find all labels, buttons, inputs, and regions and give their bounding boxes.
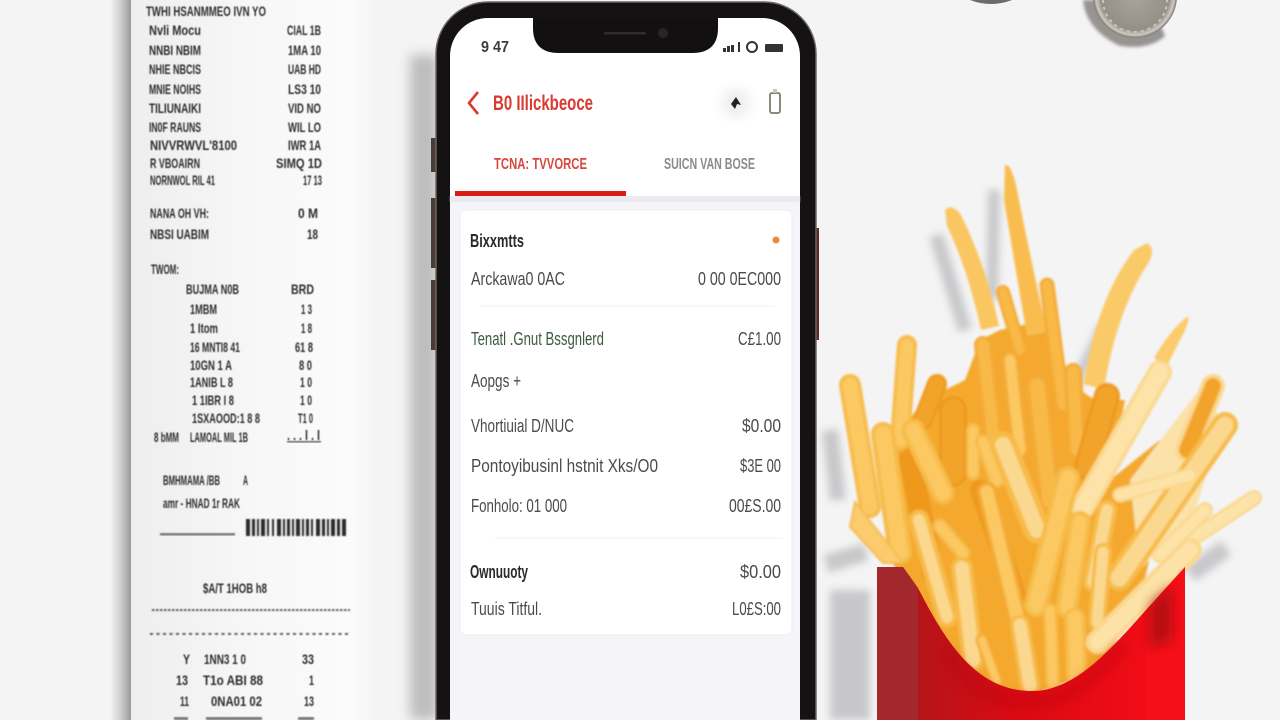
device icon bbox=[770, 89, 780, 113]
right coin bbox=[1083, 0, 1177, 47]
inactive tab label: SUICN VAN BOSE bbox=[664, 156, 755, 173]
receipt items block bbox=[149, 22, 322, 242]
receipt items block: NANA OH VH: bbox=[150, 205, 209, 221]
receipt bottom rows: 11 bbox=[180, 693, 189, 709]
row: highlighted total bbox=[471, 329, 781, 349]
receipt items block: 18 bbox=[307, 226, 318, 242]
phone shadow bbox=[410, 55, 438, 720]
phone bbox=[431, 2, 819, 720]
receipt sub-items block: 1SXAOOD:1 8 8 bbox=[192, 410, 260, 426]
fries shadows bbox=[826, 190, 1226, 720]
receipt bottom rows: 1NN3 1 0 bbox=[204, 651, 246, 667]
receipt items block: VID NO bbox=[288, 100, 321, 116]
section heading: Bixxmtts bbox=[470, 231, 524, 251]
receipt items block: Nvli Mocu bbox=[149, 22, 201, 38]
row: highlighted total: C£1.00 bbox=[738, 329, 781, 349]
row: item one: Vhortiuial D/NUC bbox=[471, 416, 574, 436]
receipt footer code: $A/T 1HOB h8 bbox=[203, 580, 267, 596]
receipt sub-items block: 1 Itom bbox=[190, 320, 218, 336]
receipt sub-items block: 1ANIB L 8 bbox=[190, 374, 233, 390]
receipt sub-items block: BRD bbox=[291, 281, 314, 297]
pale fries mass bbox=[1130, 395, 1225, 570]
row: account: Arckawa0 0AC bbox=[471, 269, 565, 289]
receipt items block: NIVVRWVL'8100 bbox=[150, 137, 237, 153]
front fries bbox=[850, 478, 1190, 686]
receipt items block: CIAL 1B bbox=[287, 22, 321, 38]
receipt sub-items block: 10GN 1 A bbox=[190, 357, 232, 373]
receipt sub-items block: 1 1IBR I 8 bbox=[192, 392, 234, 408]
receipt sub-items block: 1 3 bbox=[301, 301, 312, 317]
row: total: Tuuis Titful. bbox=[471, 599, 542, 619]
receipt items block: MNIE NOIHS bbox=[149, 81, 201, 97]
receipt items block: R VBOAIRN bbox=[150, 155, 200, 171]
left coin bbox=[970, 0, 1012, 4]
row: item two: $3E 00 bbox=[740, 456, 781, 476]
side buttons bbox=[431, 138, 819, 350]
active tab underline bbox=[455, 191, 626, 196]
receipt payment block: amr - HNAD 1r RAK bbox=[163, 495, 240, 511]
row: total bbox=[471, 599, 781, 619]
receipt sub-items block: 61 8 bbox=[295, 339, 313, 355]
receipt bottom rows: Y bbox=[183, 651, 190, 667]
receipt dotted rule bbox=[189, 562, 281, 564]
receipt barcode bbox=[246, 519, 346, 536]
row: apps heading: Aopgs + bbox=[471, 371, 521, 391]
middle fries bbox=[850, 345, 1254, 582]
row: item three bbox=[471, 496, 781, 516]
share icon bbox=[722, 89, 750, 117]
status icons bbox=[723, 42, 783, 52]
coins bbox=[970, 0, 1177, 47]
receipt payment block bbox=[160, 472, 248, 536]
receipt bbox=[110, 0, 372, 720]
receipt items block: 1MA 10 bbox=[288, 42, 321, 58]
receipt paper bbox=[131, 0, 372, 720]
receipt items block: LS3 10 bbox=[288, 81, 321, 97]
box body bbox=[877, 567, 1185, 720]
row: account: 0 00 0EC000 bbox=[698, 269, 781, 289]
content background bbox=[450, 196, 800, 720]
box right inner shadow bbox=[1150, 585, 1172, 648]
row: total: L0£S:00 bbox=[732, 599, 781, 619]
receipt sub-items block: 1 8 bbox=[301, 320, 312, 336]
receipt payment block: BMHMAMA /BB bbox=[163, 472, 220, 488]
row: quantity: $0.00 bbox=[740, 562, 781, 582]
receipt bottom rows: 1 bbox=[309, 672, 314, 688]
box opening shadow bbox=[945, 645, 1125, 702]
receipt sub-items block: 1MBM bbox=[190, 301, 217, 317]
divider bbox=[495, 537, 783, 539]
receipt bottom rows: 13 bbox=[304, 693, 314, 709]
receipt sub-items block: 1 0 bbox=[300, 392, 312, 408]
receipt items block: NORNWOL RIL 41 bbox=[150, 172, 215, 188]
row: item two: Pontoyibusinl hstnit Xks/O0 bbox=[471, 456, 658, 476]
fries box bbox=[877, 567, 1185, 720]
receipt header: TWHI HSANMMEO IVN YO bbox=[146, 3, 266, 19]
fries base mass bbox=[885, 320, 1170, 695]
card background bbox=[460, 210, 792, 635]
receipt bottom rows: 0NA01 02 bbox=[211, 693, 262, 709]
box left fold bbox=[877, 567, 918, 720]
receipt sub-items block bbox=[151, 261, 321, 445]
receipt items block: SIMQ 1D bbox=[276, 155, 322, 171]
receipt sub-items block: LAMOAL MIL 1B bbox=[190, 429, 248, 445]
receipt sub-items block: 8 0 bbox=[299, 357, 312, 373]
receipt dashed rules bbox=[150, 610, 350, 634]
notch bbox=[533, 18, 718, 53]
box right panel bbox=[1146, 567, 1185, 720]
phone body bbox=[436, 2, 816, 720]
receipt sub-items block: 8 bMM bbox=[154, 429, 179, 445]
receipt items block: UAB HD bbox=[288, 61, 321, 77]
row: highlighted total: Tenatl .Gnut Bssgnlerd bbox=[471, 329, 604, 349]
back fries bbox=[910, 285, 1213, 607]
receipt sub-items block: T1 0 bbox=[298, 410, 313, 426]
row: account bbox=[471, 269, 781, 289]
receipt sub-items block: . . . l . l bbox=[287, 427, 320, 443]
row: quantity: Ownuuoty bbox=[470, 562, 528, 582]
receipt bottom rows bbox=[174, 651, 314, 720]
row: item three: 00£S.00 bbox=[729, 496, 781, 516]
receipt sub-items block: 1 0 bbox=[300, 374, 312, 390]
row: item three: Fonholo: 01 000 bbox=[471, 496, 567, 516]
active tab label: TCNA: TVVORCE bbox=[494, 156, 587, 173]
receipt items block: IN0F RAUNS bbox=[149, 119, 201, 135]
back arrow bbox=[469, 92, 478, 114]
row: quantity bbox=[470, 562, 781, 582]
app title: B0 IIlickbeoce bbox=[493, 92, 593, 115]
speaker and camera bbox=[604, 28, 668, 38]
row: item one bbox=[471, 416, 781, 436]
receipt bottom rows: 33 bbox=[302, 651, 314, 667]
divider bbox=[480, 305, 775, 307]
french fries bbox=[850, 165, 1254, 695]
receipt shadow bbox=[110, 0, 131, 720]
receipt items block: IWR 1A bbox=[288, 137, 321, 153]
status time: 9 47 bbox=[481, 39, 509, 56]
tall back fries bbox=[945, 165, 1188, 390]
phone screen bbox=[450, 18, 800, 720]
row: item one: $0.00 bbox=[742, 416, 781, 436]
receipt items block: 17 13 bbox=[303, 172, 322, 188]
summary card bbox=[460, 210, 792, 635]
receipt items block: NNBI NBIM bbox=[149, 42, 201, 58]
receipt items block: NBSI UABIM bbox=[150, 226, 209, 242]
status dot bbox=[772, 236, 780, 244]
receipt sub-items block: 16 MNTI8 41 bbox=[190, 339, 240, 355]
receipt bottom rows: T1o ABI 88 bbox=[203, 672, 263, 688]
receipt sub-items block: BUJMA N0B bbox=[186, 281, 239, 297]
receipt sub-items block: TWOM: bbox=[151, 261, 179, 277]
receipt items block: WIL LO bbox=[288, 119, 321, 135]
receipt items block: 0 M bbox=[298, 205, 318, 221]
receipt items block: TILIUNAIKI bbox=[149, 100, 201, 116]
receipt: A bbox=[243, 472, 248, 488]
receipt items block: NHIE NBCIS bbox=[149, 61, 201, 77]
receipt bottom rows: 13 bbox=[176, 672, 188, 688]
